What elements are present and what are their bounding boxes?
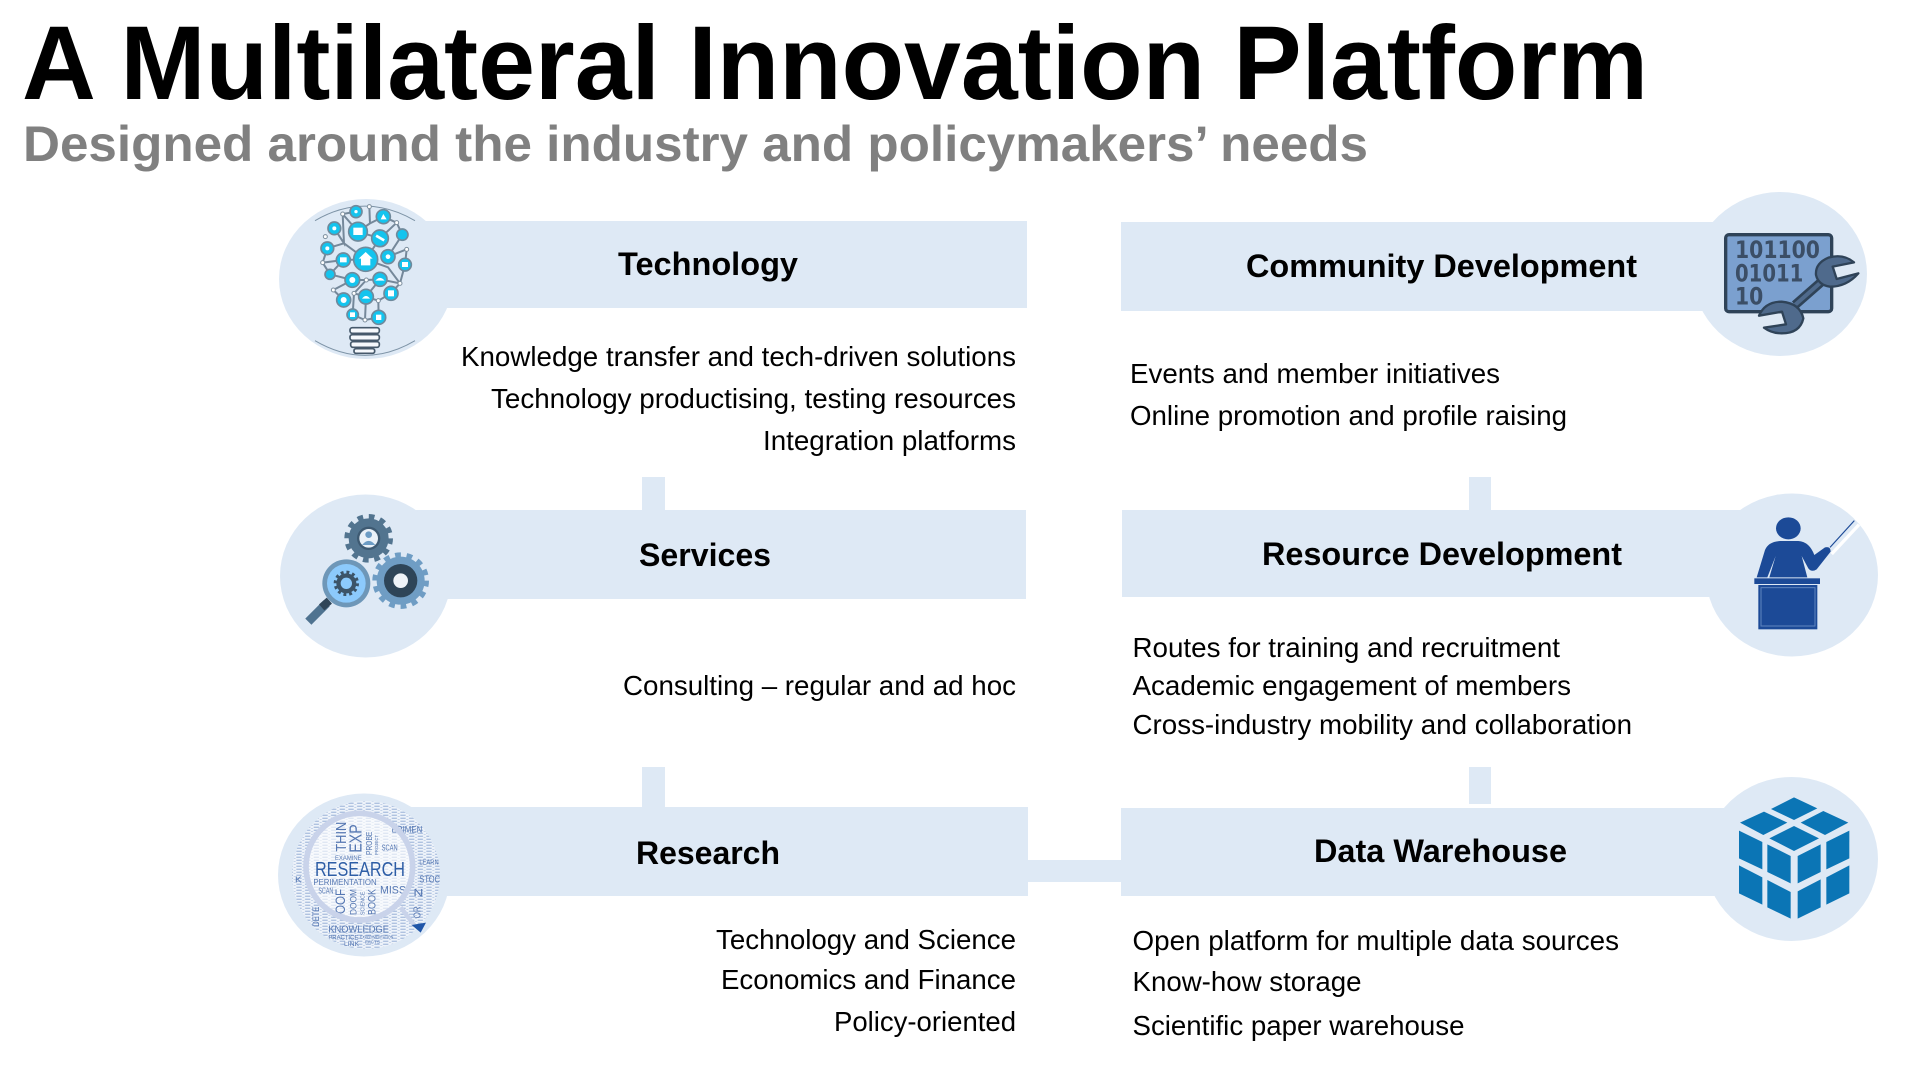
services header bar — [400, 510, 1026, 599]
icon: research magnifier word cloud: PROJECT — [374, 835, 380, 855]
resource text block: Cross-industry mobility and collaboration — [1132, 709, 1632, 740]
connector: resource to data warehouse — [1469, 767, 1491, 804]
title: A Multilateral Innovation Platform — [22, 5, 1648, 122]
data warehouse text block: Open platform for multiple data sources — [1132, 925, 1619, 956]
icon: research magnifier word cloud: DOOM — [349, 889, 359, 915]
community header bar — [1121, 222, 1741, 311]
icon: research magnifier word cloud: N — [413, 888, 423, 900]
icon: research magnifier word cloud: ERIMEN — [392, 824, 422, 834]
connector: community to resource — [1469, 477, 1491, 511]
resource text block — [1132, 632, 1632, 740]
icon: binary code and wrench: 10 — [1735, 283, 1763, 311]
technology text block: Knowledge transfer and tech-driven solutions — [461, 341, 1016, 372]
panel: research — [278, 794, 1028, 1037]
community icon circle — [1693, 192, 1867, 356]
icon: research magnifier word cloud: DETE — [311, 907, 321, 927]
technology text block — [461, 341, 1016, 456]
icon: data cube — [1739, 797, 1849, 919]
icon: research magnifier word cloud: SCAN — [382, 844, 398, 853]
resource text block: Academic engagement of members — [1132, 670, 1571, 701]
icon: research magnifier word cloud: FACTS — [365, 939, 381, 945]
icon: research magnifier word cloud: EXPERIMENTATION — [360, 934, 393, 939]
icon: research magnifier word cloud: OR — [413, 906, 424, 918]
community text block: Online promotion and profile raising — [1130, 400, 1567, 431]
icon: binary code and wrench — [1726, 235, 1858, 333]
subtitle: Designed around the industry and policymakers’ needs — [23, 116, 1368, 172]
services heading: Services — [639, 537, 771, 573]
icon: gears and magnifier — [308, 517, 426, 622]
data warehouse header bar — [1121, 808, 1741, 896]
icon: research magnifier word cloud: MISS — [380, 884, 406, 896]
connector: research to data warehouse — [1027, 860, 1122, 882]
resource text block: Routes for training and recruitment — [1132, 632, 1560, 663]
services icon circle — [280, 494, 451, 658]
icon: binary code and wrench: 101100 — [1735, 236, 1820, 264]
panel: data warehouse — [1121, 777, 1878, 1041]
research text block — [716, 924, 1016, 1037]
data warehouse text block — [1132, 925, 1619, 1041]
icon: research magnifier word cloud: SCIENCE — [360, 891, 366, 915]
icon: teacher at podium — [1754, 517, 1859, 629]
panel: technology — [279, 199, 1027, 456]
resource icon circle — [1706, 494, 1878, 656]
icon: research magnifier word cloud: PROBE — [364, 831, 374, 855]
research text block: Policy-oriented — [834, 1006, 1016, 1037]
community text block — [1130, 358, 1567, 431]
icon: research magnifier word cloud: BOOK — [366, 889, 378, 915]
icon: research magnifier word cloud: LEARN — [419, 858, 439, 867]
icon: research magnifier word cloud: STOC — [419, 875, 440, 886]
connector: technology to services — [642, 477, 665, 511]
panel: services — [280, 494, 1026, 701]
icon: research magnifier word cloud: THIN — [334, 822, 350, 852]
resource heading: Resource Development — [1262, 536, 1622, 572]
technology header bar — [400, 221, 1027, 308]
icon: research magnifier word cloud: KNOWLEDGE — [328, 924, 389, 935]
icon: research magnifier word cloud: PRACTICE — [328, 934, 359, 941]
technology icon circle — [279, 199, 453, 359]
resource header bar — [1122, 510, 1762, 597]
icon: research magnifier word cloud: LINK — [344, 941, 360, 948]
icon: light bulb network — [315, 205, 415, 355]
icon: research magnifier word cloud — [292, 801, 440, 949]
icon: research magnifier word cloud: OOF — [332, 889, 348, 914]
panel: resource development — [1122, 494, 1878, 740]
community heading: Community Development — [1246, 248, 1637, 284]
data warehouse text block: Scientific paper warehouse — [1132, 1010, 1464, 1041]
icon: research magnifier word cloud: EXAMINE — [335, 856, 362, 862]
icon: research magnifier word cloud: PERIMENTATION — [313, 877, 377, 887]
icon: research magnifier word cloud: RESEARCH — [315, 858, 405, 881]
research heading: Research — [636, 835, 780, 871]
panel: community development — [1121, 192, 1867, 431]
icon: research magnifier word cloud: K — [295, 876, 303, 885]
services text block: Consulting – regular and ad hoc — [623, 670, 1016, 701]
icon: research magnifier word cloud: EXP — [346, 824, 366, 853]
technology text block: Technology productising, testing resources — [491, 383, 1016, 414]
icon: research magnifier word cloud: SCAN — [318, 886, 333, 895]
research header bar — [400, 807, 1028, 896]
data warehouse heading: Data Warehouse — [1314, 833, 1567, 869]
research text block: Technology and Science — [716, 924, 1016, 955]
research text block: Economics and Finance — [721, 964, 1016, 995]
research icon circle — [278, 794, 450, 956]
technology heading: Technology — [618, 246, 798, 282]
data warehouse text block: Know-how storage — [1132, 966, 1362, 997]
community text block: Events and member initiatives — [1130, 358, 1500, 389]
data warehouse icon circle — [1705, 777, 1878, 941]
technology text block: Integration platforms — [763, 425, 1016, 456]
connector: services to research — [642, 767, 665, 808]
icon: binary code and wrench: 01011 — [1735, 259, 1803, 287]
